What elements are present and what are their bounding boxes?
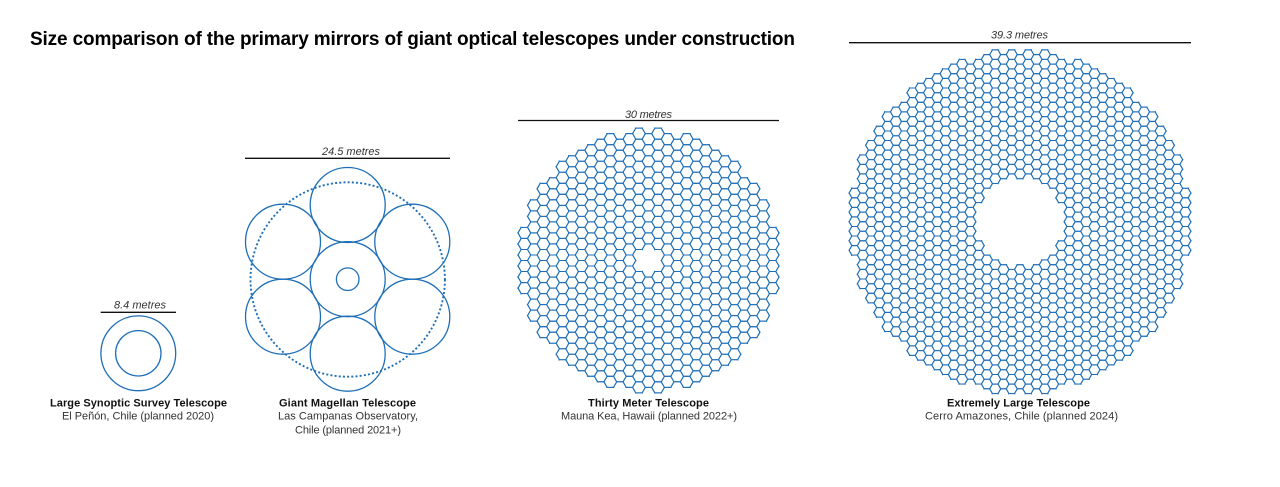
caption: GMT: Giant Magellan Telescope (279, 398, 416, 410)
mirror: LSST annulus (101, 316, 176, 391)
caption: TMT: Thirty Meter Telescope (588, 398, 709, 410)
caption: GMT (278, 398, 418, 436)
mirror: seven circular segments (246, 168, 450, 391)
scale bar: 24.5 metres: 24.5 metres (321, 146, 380, 158)
caption: GMT: Chile (planned 2021+) (295, 424, 401, 436)
mirror: hexagonal segments (848, 49, 1192, 394)
caption: TMT (561, 398, 737, 422)
title: Size comparison of the primary mirrors of giant optical telescopes under construction (30, 29, 795, 50)
caption: TMT: Mauna Kea, Hawaii (planned 2022+) (561, 410, 737, 422)
scale bar: 39.3 metres: 39.3 metres (991, 30, 1048, 42)
mirror: hexagonal segments (517, 128, 780, 394)
panel: Extremely Large Telescope (848, 31, 1192, 422)
caption: GMT: Las Campanas Observatory, (278, 410, 418, 422)
scale bar: 30 metres: 30 metres (625, 109, 672, 121)
caption: LSST (50, 398, 227, 422)
panel: Thirty Meter Telescope (517, 110, 780, 422)
caption: ELT: Extremely Large Telescope (947, 398, 1090, 410)
caption: ELT (925, 398, 1118, 422)
caption: LSST: Large Synoptic Survey Telescope (50, 398, 227, 410)
panel: Giant Magellan Telescope (245, 146, 450, 436)
caption: ELT: Cerro Amazones, Chile (planned 2024) (925, 410, 1118, 422)
dotted outline circle (251, 182, 445, 377)
caption: LSST: El Peñón, Chile (planned 2020) (62, 410, 214, 422)
panel: Large Synoptic Survey Telescope (50, 300, 227, 422)
scale bar: 8.4 metres (101, 300, 176, 312)
scale bar: 8.4 metres: 8.4 metres (114, 300, 166, 312)
